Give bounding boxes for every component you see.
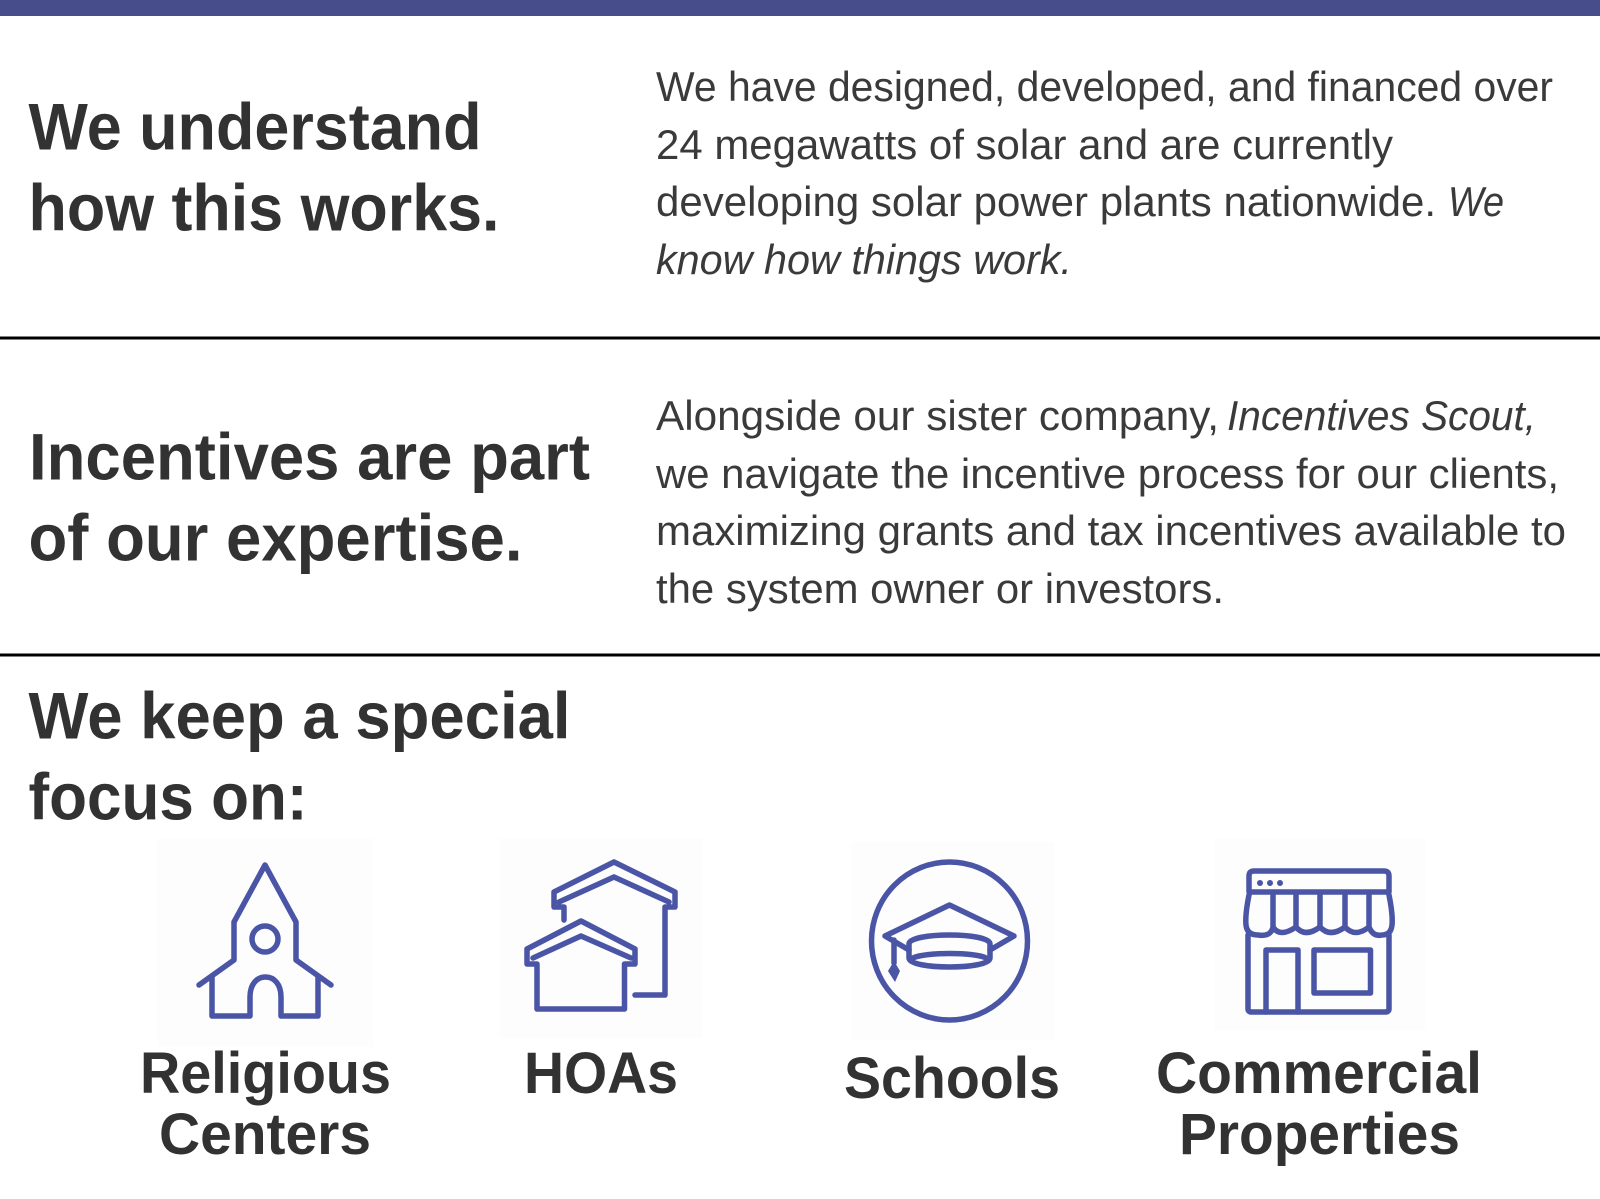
text block: solar experience: know how things work. bbox=[656, 236, 1072, 283]
heading: we keep a special focus on: focus on: bbox=[28, 760, 308, 834]
label: schools: Schools bbox=[844, 1046, 1060, 1111]
heading: we keep a special focus on: We keep a special bbox=[28, 678, 570, 752]
icon: storefront bbox=[1214, 838, 1425, 1030]
top bar bbox=[0, 0, 1600, 16]
icon: houses bbox=[500, 838, 702, 1038]
text block: solar experience: We bbox=[1448, 178, 1504, 225]
heading: we understand how this works bbox=[28, 90, 500, 244]
text block: incentives scout: Alongside our sister company, bbox=[656, 392, 1219, 439]
label: hoas: HOAs bbox=[524, 1041, 678, 1106]
panel: incentives expertise bbox=[28, 392, 1566, 612]
heading: we understand how this works: We understand bbox=[28, 90, 482, 164]
label: religious centers: Religious bbox=[140, 1041, 391, 1106]
heading: incentives are part of our expertise: of our expertise. bbox=[28, 500, 522, 574]
heading: incentives are part of our expertise bbox=[28, 420, 590, 574]
text block: incentives scout bbox=[655, 392, 1566, 612]
text block: incentives scout: we navigate the incentive process for our clients, bbox=[655, 450, 1559, 497]
text block: solar experience: 24 megawatts of solar and are currently bbox=[656, 121, 1393, 168]
text block: incentives scout: the system owner or investors. bbox=[656, 565, 1224, 612]
text block: incentives scout: Incentives Scout, bbox=[1227, 392, 1536, 439]
label: commercial properties bbox=[1156, 1041, 1482, 1167]
heading: we understand how this works: how this works. bbox=[28, 170, 500, 244]
panel: how this works bbox=[28, 63, 1553, 283]
text block: incentives scout: maximizing grants and tax incentives available to bbox=[656, 507, 1566, 554]
text block: solar experience: developing solar power plants nationwide. bbox=[656, 178, 1436, 225]
label: religious centers: Centers bbox=[159, 1102, 371, 1167]
heading: incentives are part of our expertise: Incentives are part bbox=[29, 420, 590, 494]
icon: church bbox=[157, 838, 373, 1047]
label: commercial properties: Properties bbox=[1179, 1102, 1460, 1167]
text block: solar experience: We have designed, developed, and financed over bbox=[656, 63, 1553, 110]
heading: we keep a special focus on bbox=[28, 678, 570, 834]
icon: graduation cap bbox=[851, 842, 1054, 1040]
panel: special focus bbox=[28, 678, 1482, 1167]
label: commercial properties: Commercial bbox=[1156, 1041, 1482, 1106]
text block: solar experience bbox=[656, 63, 1553, 283]
label: religious centers bbox=[140, 1041, 391, 1167]
